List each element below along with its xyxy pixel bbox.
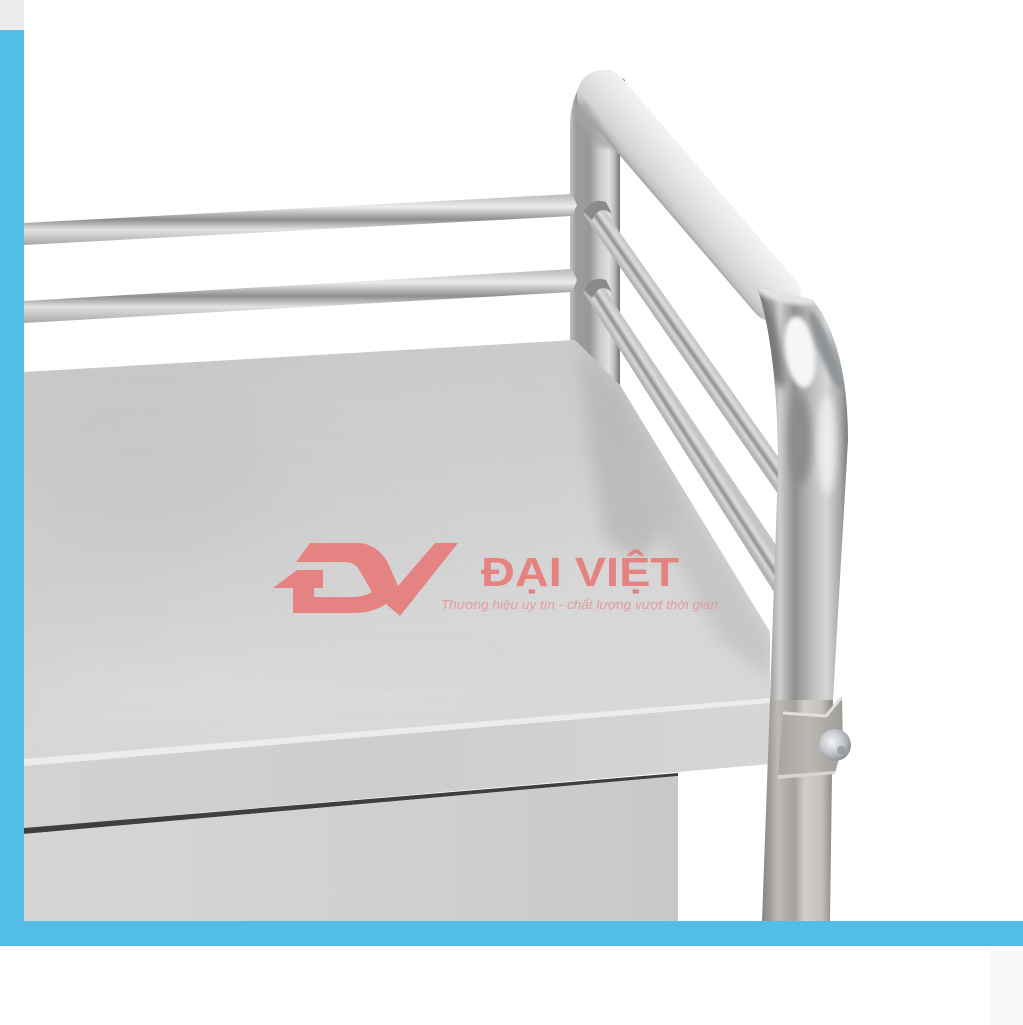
brand name: ĐẠI VIỆT [481, 549, 679, 595]
tube corner reflections [757, 287, 844, 494]
top handle bar [603, 96, 775, 296]
steel shelf surface [10, 340, 772, 762]
curved front post [757, 287, 848, 700]
top-left grey corner [0, 0, 24, 30]
logo mark DV [273, 543, 458, 616]
drawer front [24, 773, 678, 921]
shelf front lip [24, 698, 770, 828]
back rails of the trolley [24, 194, 577, 323]
logo watermark [273, 543, 718, 616]
bottom-right faint corner [989, 950, 1023, 1025]
shading at handle top [572, 100, 618, 150]
tagline: Thương hiệu uy tín - chất lượng vượt thời gian [441, 598, 718, 612]
clamp with bolt [778, 697, 851, 779]
lower leg of the front post [762, 700, 833, 921]
blue frame bottom bar [0, 921, 1023, 946]
blue frame left bar [0, 30, 24, 946]
rear post behind the shelf [570, 70, 625, 385]
side rails [583, 200, 779, 592]
